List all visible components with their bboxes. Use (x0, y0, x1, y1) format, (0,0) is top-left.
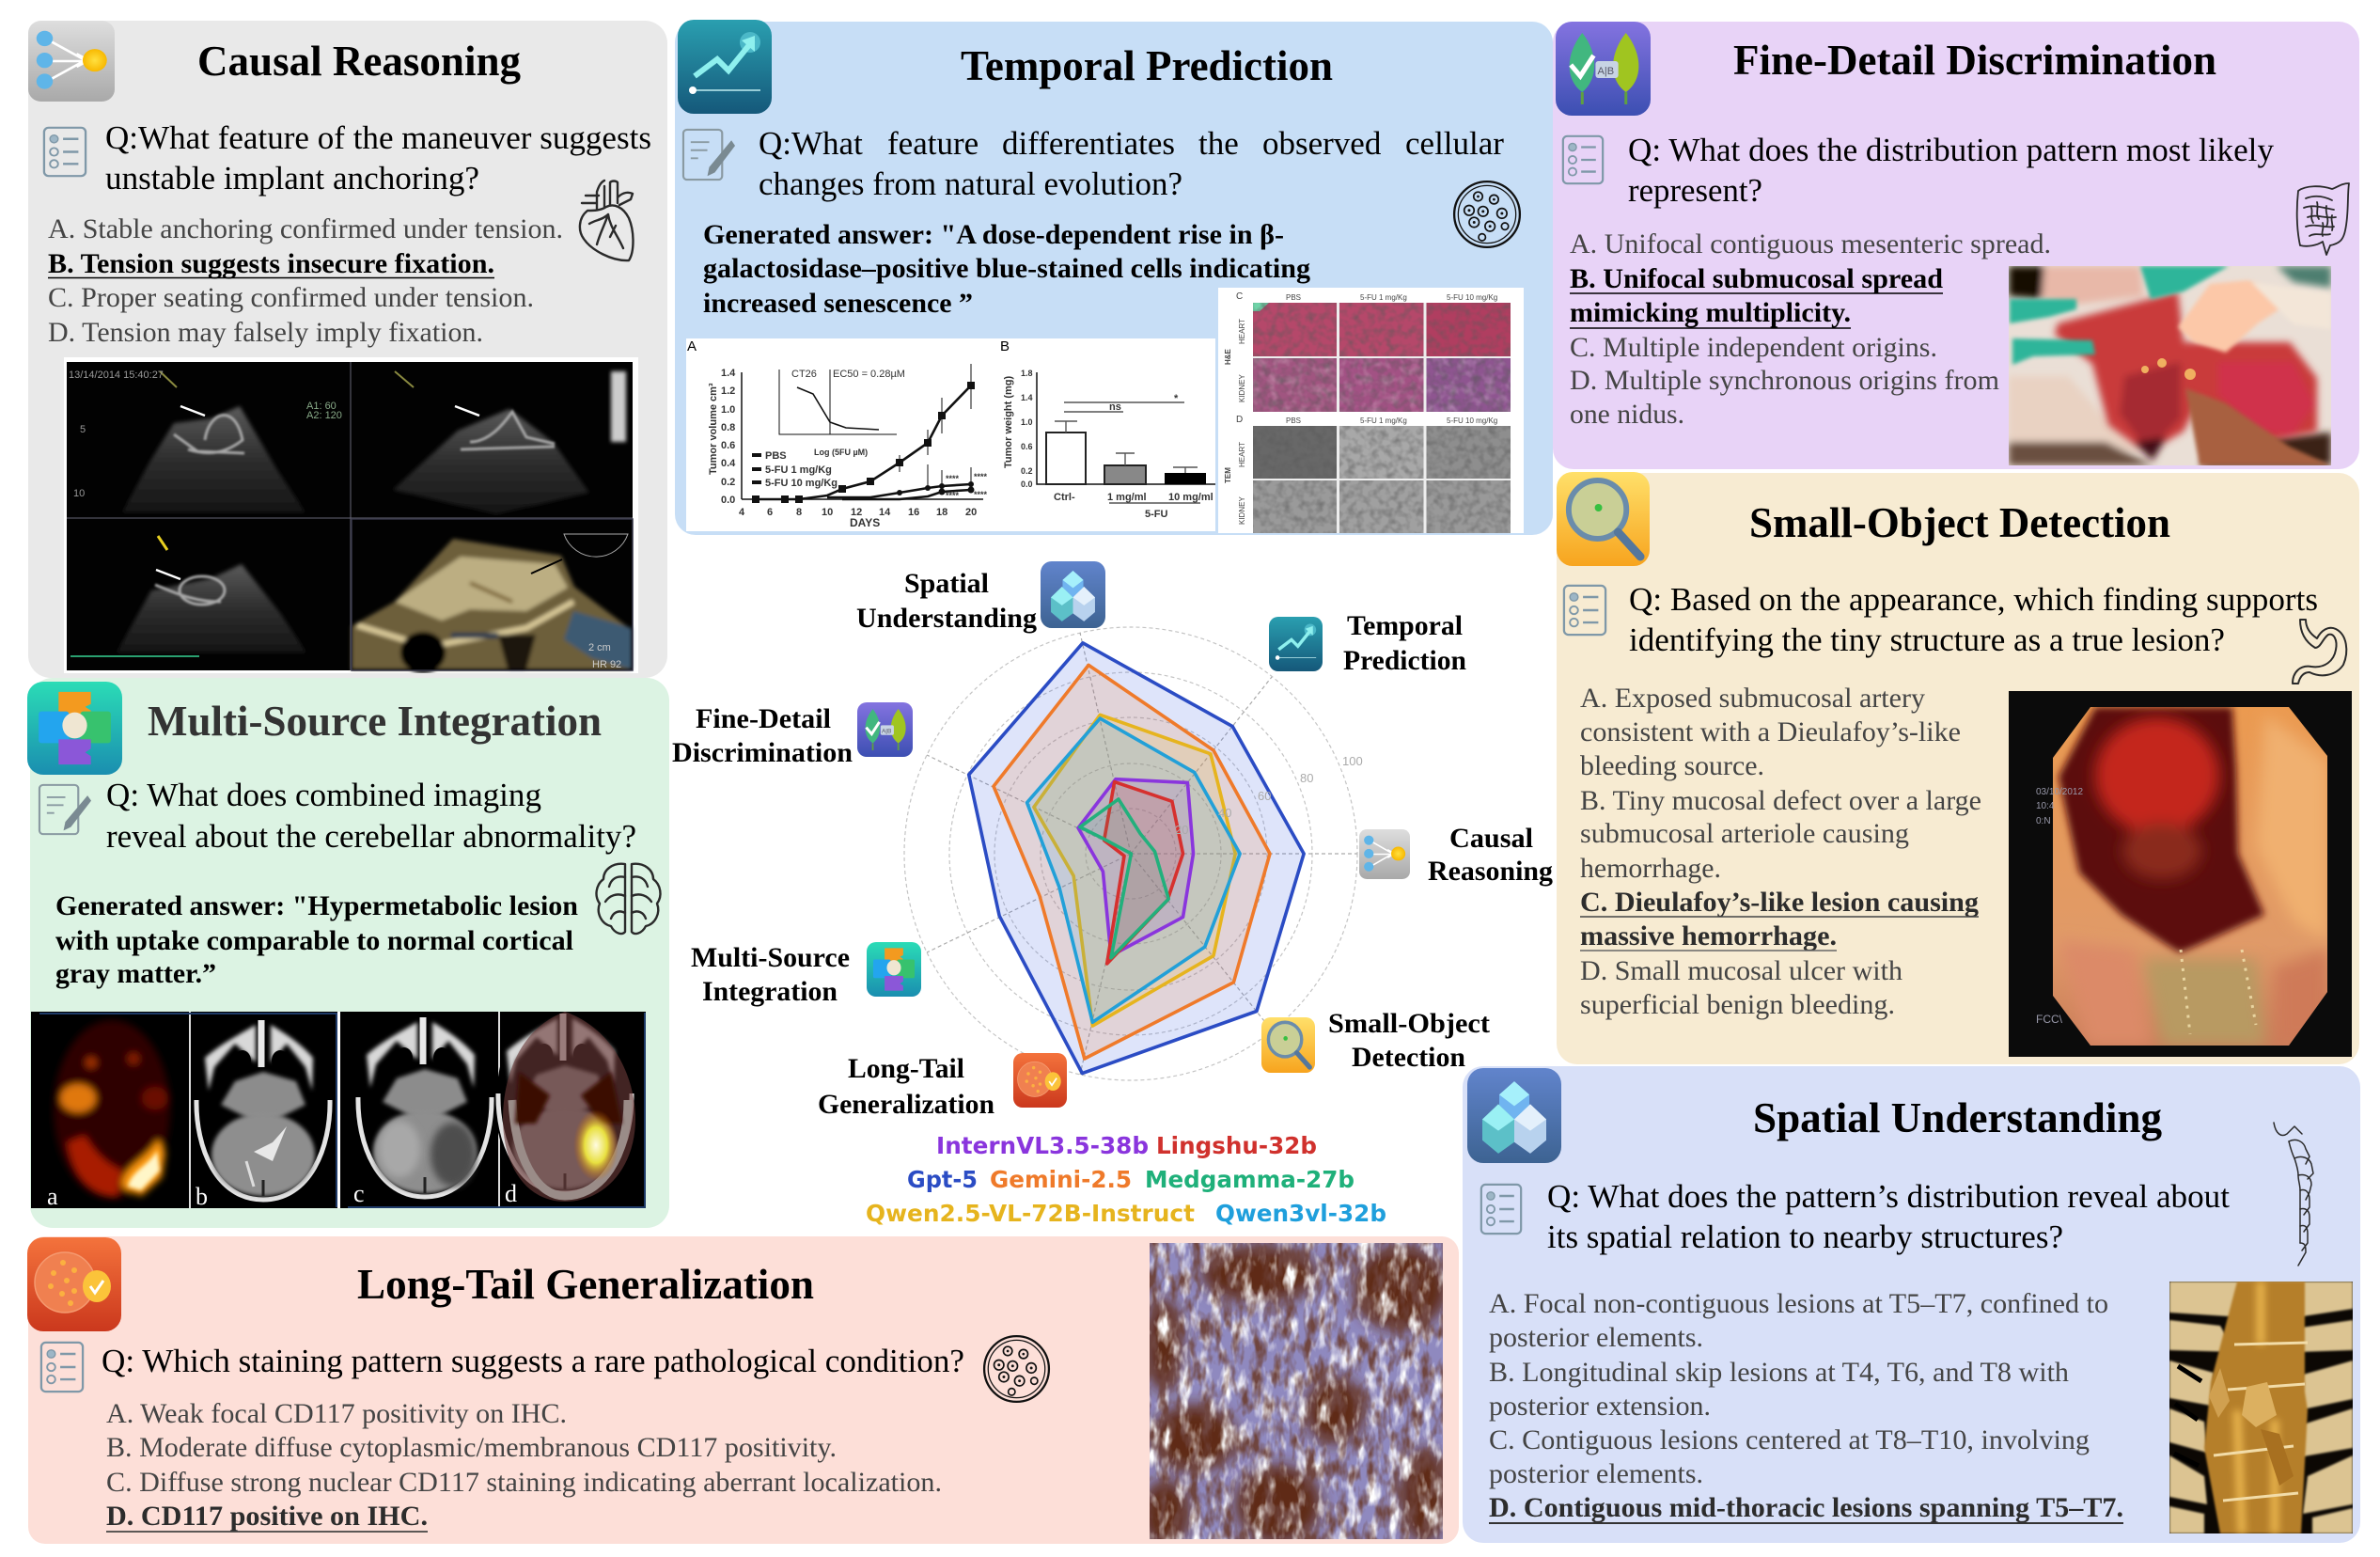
image: histology and TEM grid: 5-FU 10 mg/Kg (1447, 293, 1497, 302)
answer options: submucosal arteriole causing (1580, 818, 1909, 849)
bar chart: tumor weight: 1.0 (1021, 417, 1033, 427)
icon: magnifier (1557, 472, 1650, 566)
MRI slice b (195, 1018, 330, 1202)
image: histology and TEM grid: H&E (1224, 348, 1232, 365)
icon: checklist (1481, 1185, 1521, 1234)
question text: Q: What does combined imaging (106, 777, 541, 813)
image: surgical photo (2009, 266, 2331, 465)
answer options: D. Multiple synchronous origins from (1570, 365, 1999, 396)
answer options: posterior elements. (1489, 1458, 1703, 1489)
image: histology and TEM grid: 5-FU 1 mg/Kg (1360, 293, 1407, 302)
answer options: A. Exposed submucosal artery (1580, 683, 1925, 714)
legend: Gpt-5 (907, 1166, 978, 1193)
icon: checklist (41, 1343, 83, 1392)
image: endoscopy photo: 10:4 (2036, 801, 2055, 811)
bar chart: tumor weight: ns (1109, 401, 1121, 413)
question text: identifying the tiny structure as a true lesion? (1629, 621, 2225, 658)
heading: Causal Reasoning: Causal Reasoning (197, 37, 521, 85)
chart: tumor volume and weight: **** (974, 472, 988, 481)
answer options: massive hemorrhage. (1580, 920, 1837, 952)
answer options (1489, 1288, 2123, 1523)
bar chart: tumor weight: 0.0 (1021, 480, 1033, 489)
chart: tumor volume and weight: EC50 = 0.28µM (833, 369, 905, 380)
radar label: Temporal Prediction: Prediction (1343, 645, 1466, 676)
question text: the (1198, 125, 1239, 162)
PET/MRI fusion slice d (496, 1012, 635, 1202)
panel: Causal Reasoning (28, 21, 667, 678)
answer options: B. Longitudinal skip lesions at T4, T6, and T8 with (1489, 1357, 2069, 1388)
image: histology and TEM grid (1218, 288, 1524, 533)
answer options: D. Tension may falsely imply fixation. (48, 317, 483, 348)
image: PET and MRI axial slices: a (47, 1183, 58, 1210)
generated answer: Generated answer: "Hypermetabolic lesion (55, 890, 578, 921)
bar chart: tumor weight: 5-FU (1145, 509, 1167, 520)
legend (866, 1132, 1386, 1227)
image: echocardiography (64, 357, 638, 673)
question text (106, 777, 636, 855)
answer options: C. Multiple independent origins. (1570, 332, 1937, 363)
chart: tumor volume and weight: 8 (796, 507, 802, 518)
icon: intestine (2297, 183, 2349, 255)
question text: reveal about the cerebellar abnormality? (106, 818, 636, 855)
question text: Q:What feature of the maneuver suggests (105, 119, 651, 156)
image: histology and TEM grid: PBS (1286, 293, 1301, 302)
chart: tumor volume and weight: 4 (739, 507, 745, 518)
generated answer (55, 890, 578, 989)
image: histology and TEM grid: 5-FU 10 mg/Kg (1447, 417, 1497, 425)
chart: tumor volume and weight: **** (946, 491, 960, 500)
icon: note and pen (683, 130, 735, 180)
legend: Qwen3vl-32b (1215, 1200, 1386, 1227)
answer options: consistent with a Dieulafoy’s-like (1580, 716, 1961, 747)
answer options: B. Tiny mucosal defect over a large (1580, 785, 1981, 816)
image: endoscopy photo (2009, 691, 2352, 1057)
radar label: Fine-Detail Discrimination: Discrimination (672, 737, 853, 768)
generated answer: Generated answer: "A dose-dependent rise in β- (703, 219, 1284, 250)
generated answer: gray matter.” (55, 958, 216, 989)
answer options: A. Stable anchoring confirmed under tension. (48, 213, 563, 244)
panel: Multi-Source Integration (27, 678, 669, 1228)
chart: tumor volume and weight: 10 (822, 507, 833, 518)
image: histology and TEM grid: C (1236, 291, 1243, 302)
icon: long-tail dots (27, 1237, 121, 1331)
chart: tumor volume and weight: 5-FU 10 mg/Kg (765, 478, 838, 489)
chart: tumor volume and weight: 1.0 (721, 404, 735, 416)
image: histology and TEM grid: D (1236, 415, 1243, 425)
icon: brain (597, 864, 660, 934)
radar chart (904, 627, 1363, 1080)
bar chart: tumor weight (1003, 369, 1215, 520)
image: endoscopy photo: 0:N (2036, 816, 2051, 826)
question text: Q: Which staining pattern suggests a rare pathological condition? (102, 1343, 964, 1379)
legend: Lingshu-32b (1156, 1132, 1317, 1159)
chart: tumor volume and weight: 16 (908, 507, 919, 518)
chart: tumor volume and weight: 18 (936, 507, 947, 518)
radar tick labels: 100 (1342, 754, 1363, 768)
image: histology and TEM grid: KIDNEY (1238, 374, 1246, 402)
image: endoscopy photo: FCC\ (2036, 1013, 2063, 1026)
image: echocardiography: A1: 60 (306, 401, 337, 412)
radar label: Spatial Understanding: Spatial (904, 568, 989, 599)
icon: checklist (44, 128, 86, 176)
radar tick labels (1175, 754, 1363, 837)
image: echocardiography: 2 cm (588, 642, 611, 653)
panel: Small-Object Detection (1557, 472, 2359, 1064)
image: histology and TEM grid: 5-FU 1 mg/Kg (1360, 417, 1407, 425)
answer options: B. Unifocal submucosal spread (1570, 263, 1943, 294)
answer options: D. Small mucosal ulcer with (1580, 955, 1902, 986)
icon: cell (984, 1336, 1049, 1402)
question text: Q:What (759, 125, 863, 162)
bar chart: tumor weight: Ctrl- (1054, 492, 1075, 503)
bar chart: tumor weight: 0.2 (1021, 466, 1033, 476)
chart: tumor volume and weight: CT26 (791, 369, 817, 380)
answer options: posterior extension. (1489, 1391, 1711, 1422)
chart: tumor volume and weight: 14 (879, 507, 891, 518)
radar label: Long-Tail Generalization: Long-Tail (848, 1053, 964, 1084)
image: histology and TEM grid: TEM (1224, 467, 1232, 483)
radar label: Multi-Source Integration: Multi-Source (691, 942, 850, 973)
bar chart: tumor weight: * (1174, 393, 1179, 404)
heading: Small-Object Detection: Small-Object Detection (1749, 498, 2170, 546)
legend: InternVL3.5-38b (936, 1132, 1149, 1159)
answer options: C. Proper seating confirmed under tension. (48, 282, 534, 313)
panel: Fine-Detail Discrimination (1553, 22, 2359, 469)
question text (105, 119, 651, 197)
image: endoscopy photo: 03/10/2012 (2036, 787, 2083, 797)
image: PET and MRI axial slices: c (353, 1180, 365, 1207)
radar label: Fine-Detail Discrimination: Fine-Detail (696, 703, 831, 734)
radar label: Causal Reasoning: Causal (1449, 823, 1533, 854)
panel: Long-Tail Generalization (27, 1236, 1459, 1548)
question text (1628, 132, 2275, 209)
radar grid (904, 627, 1357, 1080)
image: histology and TEM grid: HEART (1238, 319, 1246, 344)
answer options: B. Moderate diffuse cytoplasmic/membranous CD117 positivity. (106, 1432, 837, 1463)
generated answer: galactosidase–positive blue-stained cells indicating (703, 253, 1310, 284)
answer options: superficial benign bleeding. (1580, 989, 1895, 1020)
answer options: bleeding source. (1580, 750, 1764, 781)
question text: its spatial relation to nearby structures? (1547, 1219, 2063, 1255)
line chart: tumor volume (742, 364, 983, 503)
answer options: A. Focal non-contiguous lesions at T5–T7, confined to (1489, 1288, 2108, 1319)
chart: tumor volume and weight: 0.4 (721, 458, 736, 469)
radar tick labels: 20 (1175, 823, 1188, 837)
icon: stomach (2293, 620, 2346, 684)
image: histology and TEM grid: HEART (1238, 442, 1246, 467)
answer options (1580, 683, 1981, 1020)
radar label: Long-Tail Generalization: Generalization (818, 1089, 994, 1120)
icon: cubes (1467, 1068, 1561, 1163)
question text: unstable implant anchoring? (105, 160, 479, 197)
question text: changes from natural evolution? (759, 165, 1182, 202)
chart: tumor volume and weight: PBS (765, 450, 787, 462)
bar chart: tumor weight: Tumor weight (mg) (1003, 375, 1014, 468)
panel: Spatial Understanding (1463, 1066, 2360, 1543)
radar label: Multi-Source Integration (691, 942, 921, 1007)
bar chart: tumor weight: 10 mg/ml (1168, 492, 1213, 503)
radar label: Multi-Source Integration: Integration (702, 976, 838, 1007)
question text (759, 125, 1504, 202)
icon: leaves A/B (1556, 22, 1651, 116)
image: histology and TEM grid: KIDNEY (1238, 496, 1246, 525)
image: echocardiography: 5 (80, 424, 86, 435)
question text: Q: What does the pattern’s distribution reveal about (1547, 1178, 2230, 1215)
radar label: Causal Reasoning (1359, 823, 1553, 887)
image: echocardiography: 13/14/2014 15:40:27 (69, 370, 164, 381)
radar label: Spatial Understanding (856, 561, 1105, 634)
generated answer: increased senescence ” (703, 288, 973, 319)
question text: Q: Based on the appearance, which finding supports (1629, 581, 2318, 618)
radar label: Long-Tail Generalization (818, 1053, 1067, 1120)
heading: Fine-Detail Discrimination: Fine-Detail Discrimination (1733, 36, 2216, 84)
icon: note and pen (39, 785, 91, 834)
radar label: Fine-Detail Discrimination (672, 702, 913, 768)
icon: heart (580, 181, 634, 260)
chart: tumor volume and weight: 0.6 (721, 440, 735, 451)
answer options (106, 1398, 942, 1532)
answer options: posterior elements. (1489, 1322, 1703, 1353)
bar chart: tumor weight: 0.6 (1021, 442, 1033, 451)
radar tick labels: 60 (1258, 789, 1271, 803)
bar chart: tumor weight: 1.8 (1021, 369, 1033, 378)
icon: causal reasoning (28, 21, 115, 102)
heading: Long-Tail Generalization: Long-Tail Generalization (357, 1260, 814, 1308)
chart: tumor volume and weight: 0.2 (721, 477, 735, 488)
answer options: B. Tension suggests insecure fixation. (48, 248, 494, 279)
icon: spine (2274, 1123, 2313, 1266)
chart: tumor volume and weight: A (687, 338, 697, 354)
heading: Spatial Understanding: Spatial Understanding (1753, 1093, 2162, 1141)
bar chart: tumor weight: 1 mg/ml (1107, 492, 1147, 503)
chart: tumor volume and weight: **** (946, 474, 960, 483)
image: echocardiography: A2: 120 (306, 410, 342, 421)
image: echocardiography: HR 92 (592, 659, 621, 670)
chart: tumor volume and weight: 1.2 (721, 385, 735, 397)
question text: differentiates (1002, 125, 1175, 162)
question text: Q: What does the distribution pattern most likely (1628, 132, 2275, 168)
radar label: Small-Object Detection: Detection (1352, 1042, 1465, 1073)
chart: tumor volume and weight: 0.0 (721, 495, 735, 506)
legend: Medgamma-27b (1145, 1166, 1354, 1193)
image: PET and MRI axial slices: b (196, 1183, 208, 1210)
icon: multi-source puzzle (27, 682, 122, 775)
heading: Temporal Prediction: Temporal Prediction (961, 41, 1333, 89)
radar polygons (969, 643, 1304, 1074)
radar tick labels: 80 (1300, 771, 1313, 785)
question text: feature (887, 125, 979, 162)
bar chart: tumor weight: 1.4 (1021, 393, 1033, 402)
heading: Multi-Source Integration: Multi-Source Integration (148, 697, 602, 745)
chart: tumor volume and weight: 12 (851, 507, 862, 518)
radar label: Spatial Understanding: Understanding (856, 603, 1037, 634)
chart: tumor volume and weight: B (1000, 338, 1010, 354)
chart: tumor volume and weight: Log (5FU µM) (814, 448, 868, 457)
answer options: mimicking multiplicity. (1570, 297, 1851, 328)
answer options (48, 213, 563, 348)
question text (1547, 1178, 2230, 1255)
icon: checklist (1563, 136, 1603, 183)
question text: cellular (1405, 125, 1504, 162)
answer options: hemorrhage. (1580, 853, 1721, 884)
MRI slice c (356, 1015, 492, 1199)
chart: tumor volume and weight: **** (974, 490, 988, 499)
radar label: Small-Object Detection (1261, 1008, 1490, 1073)
image: histology and TEM grid: PBS (1286, 417, 1301, 425)
chart: tumor volume and weight: 6 (767, 507, 773, 518)
question text (1629, 581, 2318, 658)
answer options: D. CD117 positive on IHC. (106, 1501, 428, 1532)
panel: Temporal Prediction (675, 20, 1553, 535)
radar label: Temporal Prediction (1269, 610, 1466, 676)
chart: tumor volume and weight: DAYS (850, 516, 880, 529)
icon: checklist (1564, 586, 1605, 635)
radar tick labels: 40 (1218, 806, 1231, 820)
chart: tumor volume and weight (686, 338, 1215, 531)
legend: Gemini-2.5 (990, 1166, 1132, 1193)
generated answer (703, 219, 1310, 319)
radar label: Small-Object Detection: Small-Object (1328, 1008, 1490, 1039)
legend: Qwen2.5-VL-72B-Instruct (866, 1200, 1195, 1227)
answer options: D. Contiguous mid-thoracic lesions spanning T5–T7. (1489, 1492, 2123, 1523)
answer options: A. Weak focal CD117 positivity on IHC. (106, 1398, 567, 1429)
answer options: C. Dieulafoy’s-like lesion causing (1580, 887, 1979, 918)
chart: tumor volume and weight: 5-FU 1 mg/Kg (765, 464, 832, 476)
chart: tumor volume and weight: Tumor volume cm³ (708, 383, 719, 475)
chart: tumor volume and weight: 20 (965, 507, 977, 518)
answer options: C. Diffuse strong nuclear CD117 staining indicating aberrant localization. (106, 1467, 942, 1498)
chart: tumor volume and weight: 0.8 (721, 422, 735, 433)
generated answer: with uptake comparable to normal cortical (55, 925, 573, 956)
image: 3D CT spine (2169, 1282, 2353, 1533)
answer options: A. Unifocal contiguous mesenteric spread. (1570, 228, 2051, 260)
image: echocardiography: 10 (73, 488, 85, 499)
icon: cell (1454, 181, 1520, 247)
image: PET and MRI axial slices (31, 1012, 646, 1210)
chart: tumor volume and weight: 1.4 (721, 368, 736, 379)
answer options: one nidus. (1570, 399, 1684, 430)
radar label: Causal Reasoning: Reasoning (1428, 856, 1553, 887)
answer options: C. Contiguous lesions centered at T8–T10, involving (1489, 1424, 2090, 1455)
radar label: Temporal Prediction: Temporal (1347, 610, 1463, 641)
image: immunohistochemistry stain (1150, 1243, 1443, 1539)
question text: observed (1262, 125, 1382, 162)
icon: temporal trend (678, 20, 772, 114)
question text: represent? (1628, 172, 1762, 209)
image: PET and MRI axial slices: d (505, 1180, 517, 1207)
answer options (1570, 228, 2051, 430)
